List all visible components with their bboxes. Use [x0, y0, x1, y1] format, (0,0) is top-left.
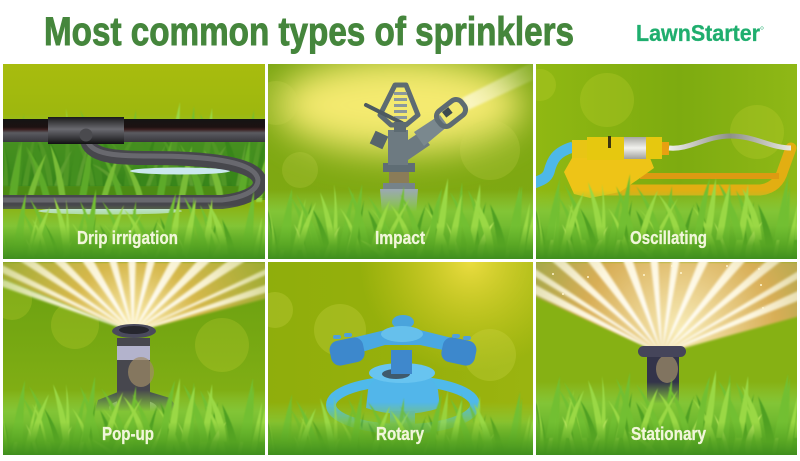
label: Rotary	[376, 424, 424, 444]
label: Drip irrigation	[77, 228, 178, 248]
impact sprinkler	[366, 85, 468, 228]
panel: pop-up	[0, 258, 275, 461]
label: Stationary	[631, 424, 706, 444]
water fan	[0, 262, 268, 332]
drip emitter tube	[3, 134, 260, 202]
rotary sprinkler	[328, 315, 478, 436]
sparkles	[552, 265, 764, 309]
water puddles	[38, 168, 230, 214]
main drip pipe	[3, 119, 265, 142]
oscillating sprinkler	[534, 136, 791, 198]
panel: oscillating	[524, 64, 800, 262]
label: Impact	[375, 228, 425, 248]
panel: drip irrigation	[3, 64, 265, 259]
pop-up sprinkler	[96, 324, 174, 410]
water fan	[534, 262, 800, 354]
water rays	[536, 262, 797, 347]
pipe coupling	[48, 117, 124, 144]
water jet	[462, 62, 533, 110]
panel: rotary	[268, 262, 533, 455]
label: Oscillating	[630, 228, 707, 248]
logo: LawnStarter: LawnStarter	[636, 20, 760, 46]
label: Pop-up	[102, 424, 154, 444]
panel: impact	[268, 64, 533, 259]
title: Most common types of sprinklers	[44, 10, 574, 54]
panel: stationary	[531, 258, 800, 455]
stationary sprinkler	[638, 346, 686, 402]
water rays	[3, 262, 265, 328]
